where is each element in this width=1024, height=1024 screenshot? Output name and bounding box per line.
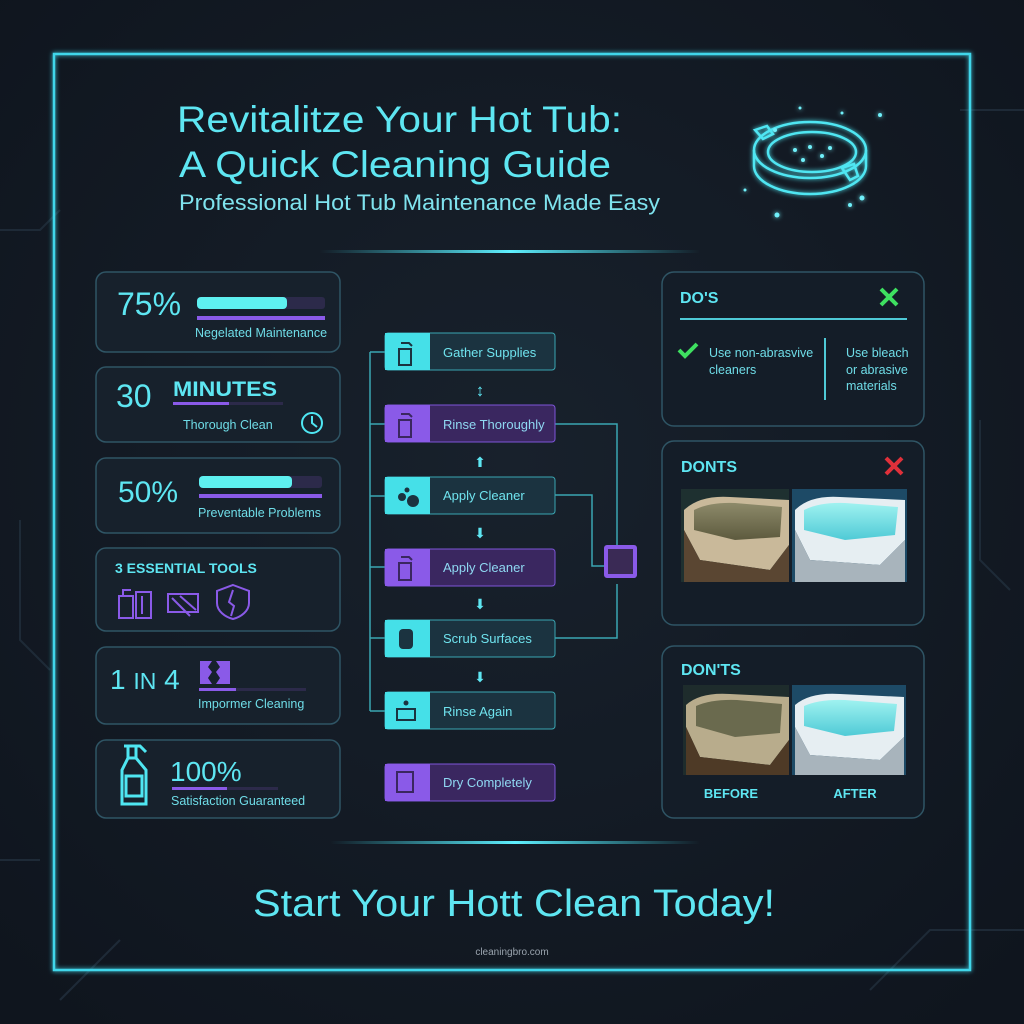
panel: don'ts before/after [662, 646, 924, 818]
image: clean tub [792, 489, 907, 582]
panel: stat 30 minutes [96, 367, 340, 442]
icon: hot tub [744, 106, 882, 218]
flow step: Rinse Again: Rinse Again [443, 704, 512, 719]
panel: stat 50%: 50% [118, 476, 178, 509]
panel: don'ts before/after: BEFORE [704, 786, 758, 801]
arrow: ⬇ [474, 596, 486, 612]
panel: do's: Use bleach [846, 346, 909, 360]
panel: 1 in 4: Impormer Cleaning [198, 697, 304, 711]
panel: do's: DO'S [680, 290, 719, 307]
footer divider [330, 841, 700, 844]
panel: stat 50% [96, 458, 340, 533]
panel: 100% [96, 740, 340, 818]
panel: stat 50%: Preventable Problems [198, 506, 321, 520]
arrow: ⬇ [474, 525, 486, 541]
panel: stat 75%: 75% [117, 286, 181, 322]
title: Revitalitze Your Hot Tub: [177, 99, 622, 140]
image: after [792, 685, 906, 775]
panel: do's [662, 272, 924, 426]
flow step: Apply Cleaner: Apply Cleaner [443, 488, 525, 503]
website: cleaningbro.com [475, 947, 549, 958]
panel: stat 75% [96, 272, 340, 352]
call to action: Start Your Hott Clean Today! [253, 883, 775, 925]
panel: donts [662, 441, 924, 625]
flow step: Rinse Thoroughly: Rinse Thoroughly [443, 417, 545, 432]
panel: 100%: 100% [170, 756, 242, 787]
flow step: Rinse Thoroughly [385, 405, 555, 442]
flow step: Scrub Surfaces: Scrub Surfaces [443, 631, 532, 646]
panel: stat 30 minutes: 30 [116, 378, 152, 414]
panel: do's: or abrasive [846, 363, 908, 377]
flow step: Gather Supplies: Gather Supplies [443, 345, 537, 360]
panel: stat 75%: Negelated Maintenance [195, 326, 327, 340]
subtitle: Professional Hot Tub Maintenance Made Easy [179, 190, 660, 215]
panel: 1 in 4 [96, 647, 340, 724]
arrow: ⬆ [474, 454, 486, 470]
flow step: Gather Supplies [385, 333, 555, 370]
panel: do's: cleaners [709, 363, 756, 377]
panel: do's: materials [846, 379, 897, 393]
header divider [320, 250, 700, 253]
icon: spray bottle [122, 746, 146, 804]
flow step: Apply Cleaner [385, 477, 555, 514]
image: before [683, 685, 789, 775]
icon: tools [119, 585, 249, 619]
flow step: Scrub Surfaces [385, 620, 555, 657]
panel: essential tools [96, 548, 340, 631]
flow node [604, 545, 637, 578]
image: dirty tub [681, 489, 789, 582]
icon: broken [200, 661, 230, 684]
panel: do's: Use non-abrasvive [709, 346, 813, 360]
flow step: Apply Cleaner 2: Apply Cleaner [443, 560, 525, 575]
icon: clock [302, 413, 322, 433]
panel: 1 in 4: 1 IN 4 [110, 664, 180, 695]
title [177, 99, 622, 185]
title: A Quick Cleaning Guide [179, 144, 611, 185]
panel: stat 30 minutes: MINUTES [173, 378, 277, 401]
flow step: Rinse Again [385, 692, 555, 729]
panel: don'ts before/after: AFTER [833, 786, 877, 801]
panel: essential tools: 3 ESSENTIAL TOOLS [115, 560, 257, 576]
panel: don'ts before/after: DON'TS [681, 662, 741, 679]
flow step: Dry Completely [385, 764, 555, 801]
arrow: ⬇ [474, 669, 486, 685]
panel: stat 30 minutes: Thorough Clean [183, 418, 273, 432]
panel: donts: DONTS [681, 459, 737, 476]
flow step: Apply Cleaner 2 [385, 549, 555, 586]
flow connectors [370, 352, 617, 711]
panel: 100%: Satisfaction Guaranteed [171, 794, 305, 808]
arrow: ↕ [476, 381, 484, 400]
flow step: Dry Completely: Dry Completely [443, 775, 532, 790]
